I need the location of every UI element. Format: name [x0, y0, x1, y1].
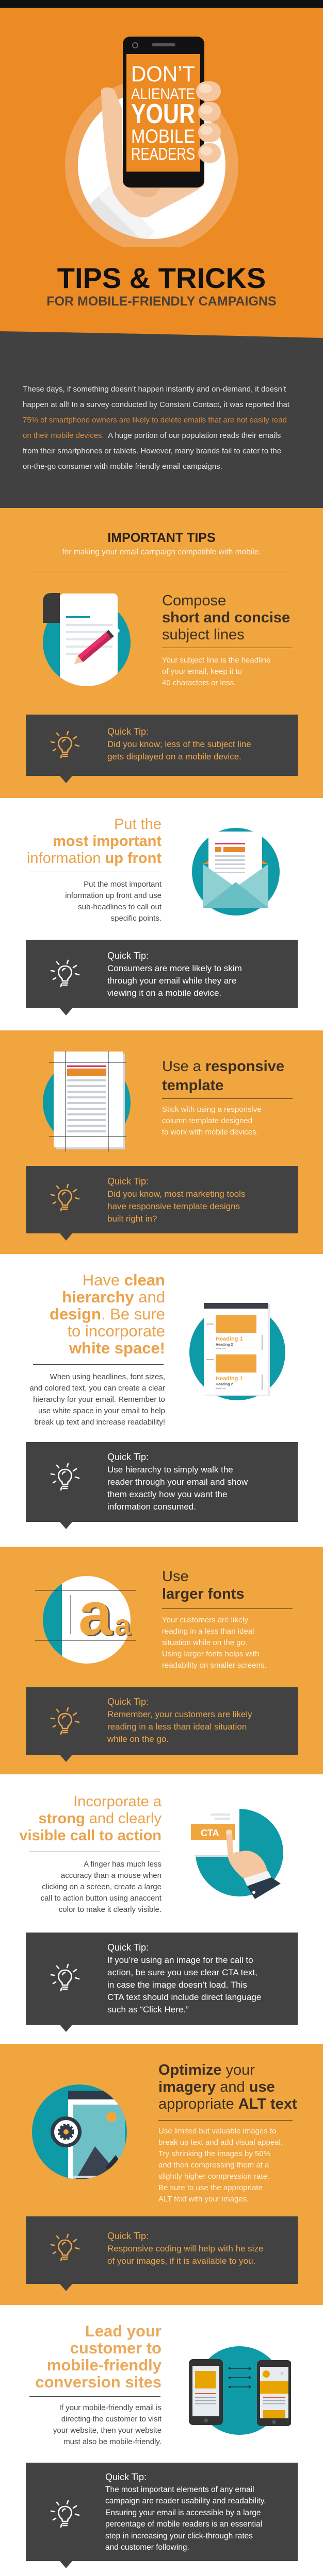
quick tip 4: [26, 1442, 298, 1522]
quick tip 6: action, be sure you use clear CTA text,: [107, 1968, 257, 1977]
section 1: compose subject lines: [0, 508, 323, 798]
section 5: larger fonts: [0, 1547, 323, 1774]
quick tip 4: reader through your email and show: [107, 1477, 248, 1487]
body: hierarchy: and colored text, you can create a clear: [29, 1384, 165, 1393]
body: up front: [65, 880, 162, 923]
quick tip 5: while on the go.: [107, 1734, 169, 1744]
quick tip 1: Did you know; less of the subject line: [107, 739, 251, 749]
icon: lightbulb: [51, 2234, 79, 2262]
quick tip 8: [26, 2463, 298, 2561]
icon: hierarchy layout: Heading 1: [216, 1376, 243, 1382]
section 3: responsive template: [0, 1030, 323, 1254]
quick tip 5: Remember, your customers are likely: [107, 1709, 252, 1719]
intro paragraph: happen at all! In a survey conducted by Constant Contact, it was reported that: [23, 400, 289, 409]
heading: put most important info up front: most important: [53, 833, 162, 850]
body: subject line: [162, 656, 270, 687]
quick tip 8: and customer following.: [105, 2543, 189, 2552]
intro paragraph: These days, if something doesn’t happen instantly and on-demand, it doesn’t: [23, 385, 286, 394]
quick tip 1: gets displayed on a mobile device.: [107, 752, 241, 761]
heading: lead your customer: customer to: [70, 2339, 162, 2357]
quick tip 8: The most important elements of any email: [105, 2485, 254, 2494]
body: hierarchy: hierarchy for your email. Remember to: [33, 1395, 165, 1404]
body: lead your customer: must also be mobile-friendly.: [63, 2437, 162, 2446]
body: responsive: column template designed: [162, 1116, 252, 1125]
quick tip 2: [26, 940, 298, 1008]
intro paragraph: [23, 385, 289, 471]
heading: compose short and concise subject lines: Compose: [162, 592, 226, 609]
phone screen title: ALIENATE: [131, 86, 195, 103]
body: call to action: A finger has much less: [84, 1860, 162, 1869]
important tips subtitle: for making your email campaign compatible with mobile.: [62, 548, 261, 556]
heading: optimize imagery: [158, 2062, 297, 2112]
intro paragraph: from their smartphones or tablets. However, many brands fail to cater to the: [23, 447, 281, 455]
quick tip 1: [26, 715, 298, 776]
heading: call to action: visible call to action: [19, 1827, 162, 1844]
subtitle: FOR MOBILE-FRIENDLY CAMPAIGNS: [46, 294, 277, 309]
body: imagery: [158, 2127, 283, 2204]
quick tip 4: Use hierarchy to simply walk the: [107, 1465, 233, 1475]
section 6: call to action: [0, 1774, 323, 2044]
heading: lead your customer: conversion sites: [35, 2373, 162, 2391]
heading: clean hierarchy: hierarchy and: [62, 1288, 165, 1306]
icon: hierarchy layout: Heading 2: [216, 1343, 233, 1347]
icon: lightbulb: [51, 731, 79, 758]
body: subject line: Your subject line is the headline: [162, 656, 270, 665]
icon: CTA button with finger: CTA: [201, 1828, 219, 1838]
intro paragraph: 75% of smartphone owners are likely to delete emails that are not easily read: [23, 416, 287, 425]
icon: responsive template: [43, 1051, 131, 1151]
heading: clean hierarchy: Have clean: [83, 1271, 165, 1289]
phone screen title: MOBILE: [131, 126, 195, 147]
quick tip 2: Consumers are more likely to skim: [107, 963, 242, 973]
body: up front: sub-headlines to call out: [78, 903, 162, 911]
heading: use larger fonts: larger fonts: [162, 1586, 245, 1602]
heading: lead your customer: Lead your: [85, 2322, 162, 2340]
quick tip 3: Did you know, most marketing tools: [107, 1189, 245, 1199]
body: subject line: of your email, keep it to: [162, 667, 242, 676]
body: hierarchy: break up text and increase readability!: [35, 1418, 165, 1427]
heading: lead your customer: [35, 2322, 162, 2391]
icon: image with gear: [32, 2084, 127, 2179]
hero banner: [0, 0, 323, 361]
heading: clean hierarchy: white space!: [69, 1339, 165, 1357]
quick tip 4: information consumed.: [107, 1502, 196, 1512]
body: imagery: Try shrinking the images by 50%: [158, 2149, 270, 2158]
icon: hierarchy layout: Heading 2: [216, 1383, 233, 1386]
body: imagery: ALT text with your images.: [158, 2195, 249, 2204]
icon: CTA button with finger: [191, 1809, 283, 1899]
heading: responsive template: Use a responsive: [162, 1058, 284, 1075]
quick tip 4: Quick Tip:: [107, 1452, 149, 1462]
icon: lightbulb: [51, 2500, 79, 2528]
quick tip 3: Quick Tip:: [107, 1176, 149, 1187]
quick tip 5: reading in a less than ideal situation: [107, 1722, 247, 1732]
icon: lightbulb: [51, 1463, 79, 1491]
icon: larger fonts Aa: a: [78, 1580, 113, 1648]
body: hierarchy: When using headlines, font sizes,: [50, 1372, 165, 1381]
hero illustration: hand holding phone: [65, 37, 238, 247]
phone screen title: READERS: [131, 144, 195, 163]
quick tip 5: [26, 1687, 298, 1755]
icon: lightbulb: [51, 1184, 79, 1212]
heading: clean hierarchy: design. Be sure: [50, 1305, 165, 1323]
heading: compose short and concise subject lines: subject lines: [162, 626, 245, 643]
quick tip 6: CTA text should include direct language: [107, 1992, 261, 2002]
quick tip 8: step in increasing your click-through rates: [105, 2532, 253, 2540]
phone screen title: [131, 62, 195, 163]
heading: put most important info up front: [27, 816, 162, 867]
body: imagery: and then compressing them at a: [158, 2161, 269, 2170]
intro paragraph: on their mobile devices. A huge portion of our population reads their emails: [23, 431, 281, 440]
heading: call to action: strong and clearly: [38, 1810, 162, 1827]
body: up front: information up front and use: [65, 891, 162, 900]
icon: larger fonts Aa: a: [115, 1608, 131, 1641]
icon: lightbulb: [51, 1707, 79, 1735]
body: responsive: [162, 1105, 262, 1137]
quick tip 8: Ensuring your email is accessible by a large: [105, 2508, 261, 2517]
main title: TIPS & TRICKS: [57, 262, 266, 294]
body: up front: Put the most important: [84, 880, 162, 889]
quick tip 6: [26, 1933, 298, 2025]
heading: use larger fonts: [162, 1568, 245, 1602]
body: larger fonts: readability on smaller screens.: [162, 1661, 267, 1670]
body: larger fonts: Using larger fonts helps with: [162, 1650, 259, 1658]
body: call to action: color to make it clearly visible.: [59, 1905, 162, 1914]
icon: larger fonts Aa: a: [116, 1609, 132, 1642]
heading: call to action: Incorporate a: [73, 1793, 162, 1810]
icon: hierarchy layout: Body Text: [216, 1387, 226, 1389]
quick tip 8: campaign are reader usability and readability.: [105, 2497, 266, 2505]
quick tip 2: Quick Tip:: [107, 951, 149, 961]
heading: put most important info up front: Put the: [114, 816, 162, 833]
quick tip 5: Quick Tip:: [107, 1697, 149, 1707]
body: imagery: break up text and add visual appeal.: [158, 2138, 283, 2147]
heading: clean hierarchy: [50, 1271, 165, 1357]
quick tip 4: them exactly how you want the: [107, 1489, 227, 1499]
intro panel: [0, 331, 323, 508]
body: hierarchy: use white space in your email to help: [38, 1406, 165, 1415]
icon: compose document with pencil: [43, 593, 131, 686]
heading: compose short and concise subject lines: [162, 592, 290, 643]
quick tip 6: If you’re using an image for the call to: [107, 1955, 253, 1965]
body: call to action: clicking on a screen, create a large: [42, 1883, 162, 1891]
body: responsive: Stick with using a responsive: [162, 1105, 262, 1114]
icon: two phones with arrows: [189, 2346, 291, 2435]
quick tip 8: percentage of mobile readers is an essential: [105, 2520, 262, 2529]
heading: lead your customer: mobile-friendly: [47, 2356, 162, 2374]
section 2: important info up front: [0, 798, 323, 1030]
section 4: hierarchy and white space: [0, 1254, 323, 1547]
body: subject line: 40 characters or less.: [162, 679, 236, 687]
icon: larger fonts Aa: a: [80, 1581, 115, 1649]
heading: responsive template: [162, 1058, 284, 1094]
quick tip 3: built right in?: [107, 1214, 157, 1224]
top black bar: [0, 0, 323, 8]
phone screen title: DON’T: [131, 62, 195, 87]
quick tip 2: through your email while they are: [107, 976, 236, 986]
icon: larger fonts Aa: [35, 1576, 136, 1664]
icon: hierarchy layout: Body Text: [216, 1347, 226, 1350]
body: hierarchy: [29, 1372, 165, 1427]
body: lead your customer: [53, 2403, 162, 2446]
phone screen title: YOUR: [131, 98, 195, 129]
heading: put most important info up front: information up front: [27, 850, 162, 867]
heading: clean hierarchy: to incorporate: [67, 1322, 165, 1340]
heading: optimize imagery: Optimize your: [158, 2062, 255, 2078]
quick tip 2: viewing it on a mobile device.: [107, 988, 221, 998]
heading: optimize imagery: imagery and use: [158, 2079, 275, 2095]
icon: hierarchy layout: Heading 1: [216, 1336, 243, 1342]
quick tip 8: Quick Tip:: [105, 2472, 147, 2482]
icon: lightbulb: [51, 959, 79, 987]
quick tip 3: [26, 1166, 298, 1233]
heading: compose short and concise subject lines: short and concise: [162, 609, 290, 626]
body: lead your customer: your website, then your website: [53, 2426, 162, 2435]
body: larger fonts: Your customers are likely: [162, 1616, 248, 1624]
body: call to action: accuracy than a mouse when: [61, 1871, 162, 1880]
body: call to action: call to action button using anaccent: [41, 1894, 162, 1903]
section 8: mobile-friendly conversion sites: [0, 2305, 323, 2576]
quick tip 6: Quick Tip:: [107, 1942, 149, 1953]
body: imagery: Use limited but valuable images to: [158, 2127, 276, 2136]
body: responsive: to work with mobile devices.: [162, 1128, 259, 1137]
body: lead your customer: If your mobile-friendly email is: [59, 2403, 162, 2412]
body: call to action: [41, 1860, 162, 1914]
body: lead your customer: directing the customer to visit: [61, 2415, 162, 2424]
heading: use larger fonts: Use: [162, 1568, 189, 1585]
quick tip 7: of your images, if it is available to you.: [107, 2256, 255, 2266]
body: imagery: slightly higher compression rate.: [158, 2172, 269, 2181]
icon: lightbulb: [51, 1964, 79, 1992]
body: larger fonts: reading in a less than ideal: [162, 1627, 254, 1636]
heading: optimize imagery: appropriate ALT text: [158, 2096, 297, 2112]
body: up front: specific points.: [111, 914, 162, 923]
quick tip 3: have responsive template designs: [107, 1201, 240, 1211]
heading: call to action: [19, 1793, 162, 1844]
body: larger fonts: situation while on the go.: [162, 1638, 247, 1647]
quick tip 7: Responsive coding will help with he size: [107, 2244, 263, 2253]
heading: responsive template: template: [162, 1077, 223, 1094]
icon: envelope: [192, 828, 280, 916]
icon: hierarchy layout: [189, 1303, 285, 1400]
quick tip 7: [26, 2216, 298, 2284]
important tips heading: IMPORTANT TIPS: [107, 531, 216, 545]
body: imagery: Be sure to use the appropriate: [158, 2183, 263, 2192]
intro paragraph: on-the-go consumer with mobile friendly email campaigns.: [23, 462, 222, 471]
body: larger fonts: [162, 1616, 267, 1670]
quick tip 6: such as “Click Here.”: [107, 2005, 189, 2014]
section 7: imagery and ALT text: [0, 2044, 323, 2305]
quick tip 6: in case the image doesn’t load. This: [107, 1980, 247, 1990]
quick tip 1: Quick Tip:: [107, 726, 149, 737]
quick tip 7: Quick Tip:: [107, 2231, 149, 2241]
